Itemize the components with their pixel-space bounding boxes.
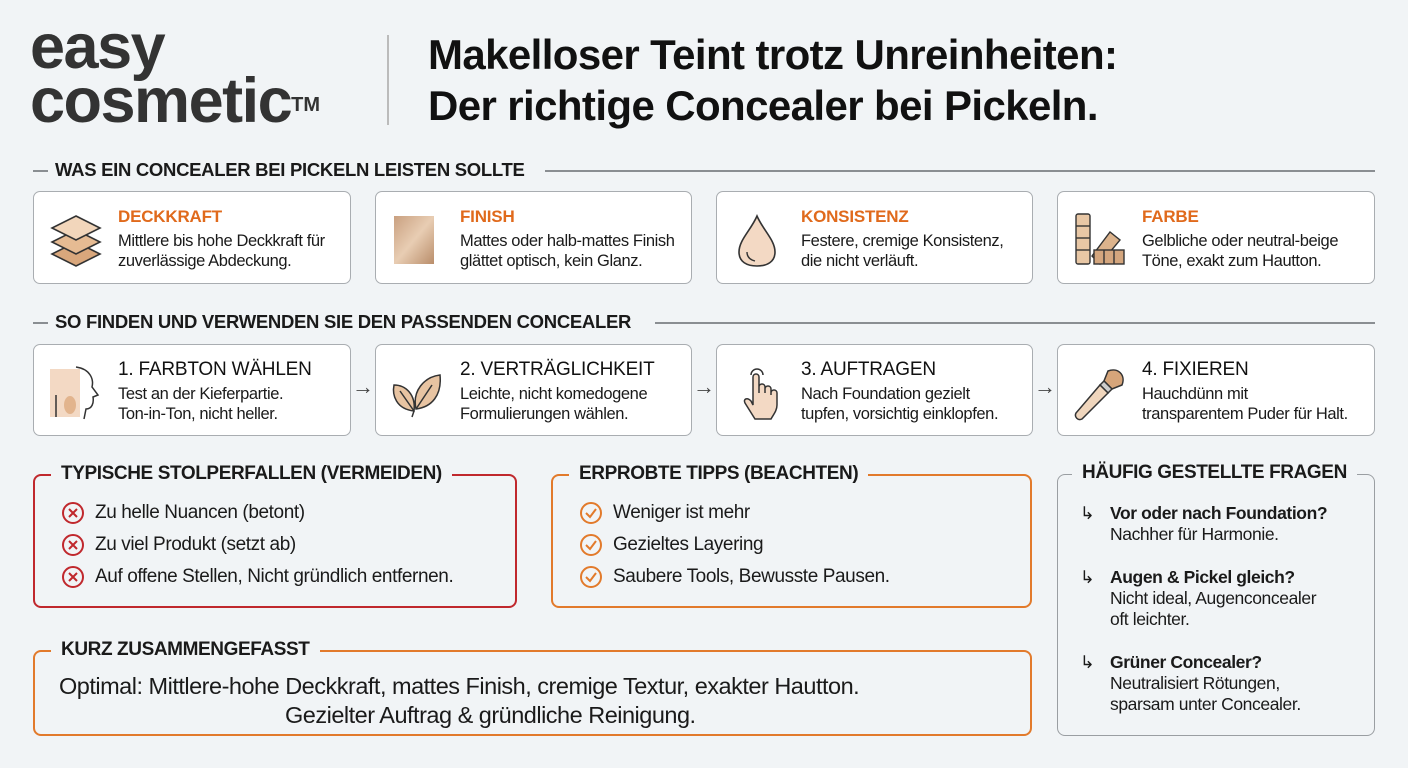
faq 3: ↳: [1080, 652, 1094, 672]
title: Makelloser Teint trotz Unreinheiten:: [428, 31, 1117, 78]
logo: [30, 12, 320, 136]
faq 2: oft leichter.: [1110, 609, 1189, 629]
faq 1: Vor oder nach Foundation?: [1110, 503, 1327, 523]
step 2: 2. VERTRÄGLICHKEIT: [460, 359, 655, 380]
panel: Tipps: [551, 474, 1032, 608]
panel: Zusammenfassung: [33, 650, 1032, 736]
card: Farbe: FARBE: [1142, 207, 1199, 226]
card: Farbe: Gelbliche oder neutral-beige: [1142, 232, 1338, 250]
text: KURZ ZUSAMMENGEFASST: [61, 639, 310, 660]
faq 2: Nicht ideal, Augenconcealer: [1110, 588, 1316, 608]
card: Konsistenz: Festere, cremige Konsistenz,: [801, 232, 1003, 250]
section header 2: SO FINDEN UND VERWENDEN SIE DEN PASSENDEN CONCEALER: [55, 311, 631, 332]
card: Finish: [375, 191, 692, 284]
faq 1: Nachher für Harmonie.: [1110, 524, 1279, 544]
faq 3: Neutralisiert Rötungen,: [1110, 673, 1280, 693]
text: ERPROBTE TIPPS (BEACHTEN): [579, 463, 858, 484]
title: [428, 31, 1117, 129]
step 2: Leichte, nicht komedogene: [460, 385, 647, 403]
step 2: [375, 344, 692, 436]
card: Deckkraft: DECKKRAFT: [118, 207, 222, 226]
step 1: 1. FARBTON WÄHLEN: [118, 359, 312, 380]
panel: Zusammenfassung: Optimal: Mittlere-hohe Deckkraft, mattes Finish, cremige Textur, exakter Hautton.: [59, 673, 859, 699]
faq 3: sparsam unter Concealer.: [1110, 694, 1301, 714]
card: Farbe: Töne, exakt zum Hautton.: [1142, 252, 1321, 270]
step 4: [1057, 344, 1375, 436]
faq 2: ↳: [1080, 567, 1094, 587]
card: Konsistenz: KONSISTENZ: [801, 207, 909, 226]
panel: Zusammenfassung: Gezielter Auftrag & gründliche Reinigung.: [285, 702, 696, 728]
panel: FAQ: [1057, 474, 1375, 736]
card: Deckkraft: Mittlere bis hohe Deckkraft für: [118, 232, 325, 250]
faq 2: Augen & Pickel gleich?: [1110, 567, 1295, 587]
step 2: Formulierungen wählen.: [460, 405, 628, 423]
item: Gezieltes Layering: [613, 534, 763, 555]
step 1: Test an der Kieferpartie.: [118, 385, 283, 403]
logo: easy: [30, 12, 164, 82]
item: Auf offene Stellen, Nicht gründlich entfernen.: [95, 566, 453, 587]
card: Finish: FINISH: [460, 207, 515, 226]
step 1: Ton-in-Ton, nicht heller.: [118, 405, 278, 423]
faq 3: Grüner Concealer?: [1110, 652, 1262, 672]
item: Zu viel Produkt (setzt ab): [95, 534, 296, 555]
text: HÄUFIG GESTELLTE FRAGEN: [1082, 462, 1347, 483]
card: Konsistenz: [716, 191, 1033, 284]
title: Der richtige Concealer bei Pickeln.: [428, 82, 1098, 129]
card: Farbe: [1057, 191, 1375, 284]
item: Zu helle Nuancen (betont): [95, 502, 305, 523]
panel: Stolperfallen: [33, 474, 517, 608]
step 1: [33, 344, 351, 436]
section header 1: WAS EIN CONCEALER BEI PICKELN LEISTEN SOLLTE: [55, 159, 525, 180]
card: Finish: glättet optisch, kein Glanz.: [460, 252, 642, 270]
step 3: Nach Foundation gezielt: [801, 385, 970, 403]
card: Deckkraft: zuverlässige Abdeckung.: [118, 252, 291, 270]
faq 1: [1080, 503, 1327, 544]
card: Deckkraft: [33, 191, 351, 284]
card: Finish: Mattes oder halb-mattes Finish: [460, 232, 675, 250]
faq 1: ↳: [1080, 503, 1094, 523]
card: Konsistenz: die nicht verläuft.: [801, 252, 918, 270]
faq 3: [1080, 652, 1301, 714]
logo: cosmeticTM: [30, 66, 320, 136]
arrow: →: [693, 374, 715, 399]
item: Saubere Tools, Bewusste Pausen.: [613, 566, 890, 587]
step 3: 3. AUFTRAGEN: [801, 359, 936, 380]
arrow: →: [1034, 374, 1056, 399]
faq 2: [1080, 567, 1316, 629]
step 4: 4. FIXIEREN: [1142, 359, 1249, 380]
item: Weniger ist mehr: [613, 502, 750, 523]
text: TYPISCHE STOLPERFALLEN (VERMEIDEN): [61, 463, 442, 484]
step 4: transparentem Puder für Halt.: [1142, 405, 1348, 423]
step 4: Hauchdünn mit: [1142, 385, 1248, 403]
arrow: →: [352, 374, 374, 399]
step 3: tupfen, vorsichtig einklopfen.: [801, 405, 998, 423]
step 3: [716, 344, 1033, 436]
